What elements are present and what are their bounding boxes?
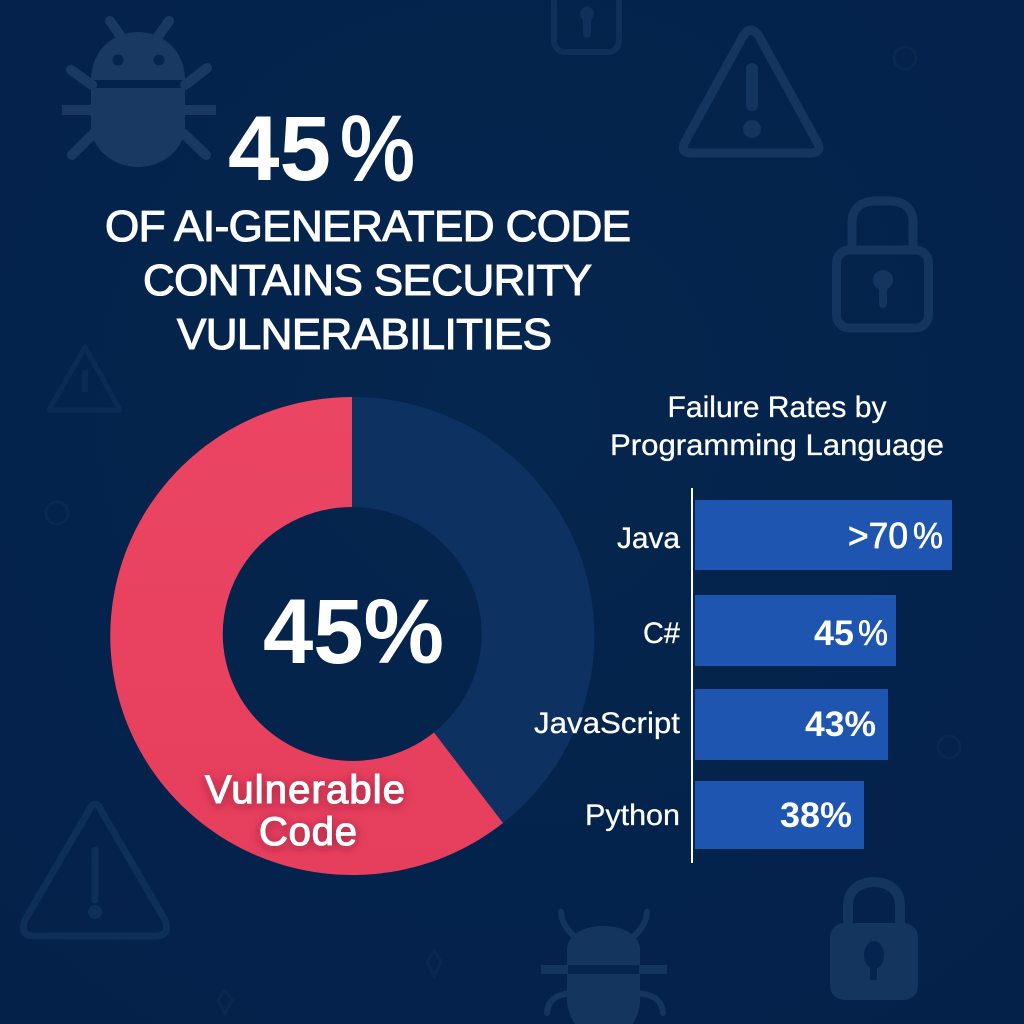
- bar chart: [534, 488, 952, 863]
- icon: bug bottom centre: [541, 912, 667, 1024]
- bar: C#: C#: [643, 617, 680, 650]
- icon: warning triangle top right: [683, 30, 819, 153]
- donut segment: vulnerable code: [110, 397, 503, 875]
- headline text: [105, 202, 631, 359]
- icon: padlock bottom right: [830, 882, 918, 1000]
- bar: JavaScript: [534, 689, 888, 760]
- bar chart heading: Programming Language: [610, 429, 944, 462]
- headline text: VULNERABILITIES: [177, 310, 552, 359]
- headline statistic: [228, 98, 415, 200]
- bar: Python: Python: [585, 799, 680, 832]
- headline text: CONTAINS SECURITY: [143, 256, 592, 305]
- headline statistic: 45: [228, 98, 331, 200]
- bar: JavaScript: 43%: [805, 705, 876, 744]
- icon: padlock top centre: [554, 0, 619, 52]
- bar: C#: [643, 595, 896, 666]
- donut segment label: Vulnerable: [205, 768, 405, 812]
- bar: Python: 38%: [780, 796, 852, 835]
- donut chart: [110, 397, 594, 875]
- headline text: OF AI-GENERATED CODE: [105, 202, 631, 251]
- bar chart heading: [610, 391, 944, 462]
- bar chart heading: Failure Rates by: [668, 391, 886, 424]
- bar: Python: [585, 781, 864, 849]
- bar: Java: [617, 500, 952, 570]
- donut centre value: 45%: [263, 581, 444, 683]
- icon: padlock right: [836, 201, 928, 328]
- icon: bug top left: [62, 21, 216, 167]
- headline statistic: %: [340, 98, 415, 200]
- icon: warning triangle bottom left: [23, 804, 167, 936]
- bar: C#: 45: [814, 614, 854, 653]
- donut segment: remainder: [352, 397, 594, 823]
- bar: Java: %: [913, 515, 943, 556]
- axis: [691, 488, 693, 863]
- bar: C#: %: [858, 614, 888, 653]
- icon: faint warning triangle left: [49, 347, 120, 410]
- donut segment label: Code: [259, 810, 357, 854]
- bar: Java: Java: [617, 522, 680, 555]
- bar: JavaScript: JavaScript: [534, 707, 681, 740]
- donut segment label: [205, 768, 405, 854]
- bar: Java: >70: [848, 515, 908, 556]
